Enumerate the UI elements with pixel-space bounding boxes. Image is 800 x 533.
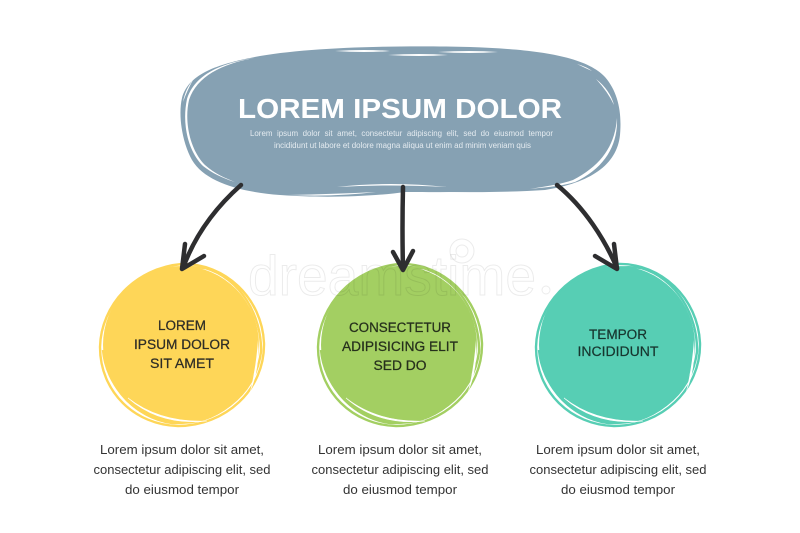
green description: consectetur adipiscing elit, sed bbox=[312, 462, 488, 477]
teal description bbox=[530, 442, 706, 497]
teal description: do eiusmod tempor bbox=[561, 482, 676, 497]
yellow description: consectetur adipiscing elit, sed bbox=[94, 462, 270, 477]
green circle label: CONSECTETUR bbox=[349, 320, 451, 335]
panel: yellow circle bbox=[100, 264, 264, 426]
green description: Lorem ipsum dolor sit amet, bbox=[318, 442, 482, 457]
header description: incididunt ut labore et dolore magna aliqua ut enim ad minim veniam quis bbox=[274, 140, 531, 150]
teal description: Lorem ipsum dolor sit amet, bbox=[536, 442, 700, 457]
teal circle label: TEMPOR bbox=[589, 327, 647, 342]
arrow: left bbox=[182, 185, 241, 269]
yellow circle label: IPSUM DOLOR bbox=[134, 337, 230, 352]
header description: Lorem ipsum dolor sit amet, consectetur adipiscing elit, sed do eiusmod tempor bbox=[250, 128, 553, 138]
green circle label bbox=[342, 320, 458, 373]
watermark: dreamstime bbox=[248, 244, 536, 307]
green description: do eiusmod tempor bbox=[343, 482, 458, 497]
header description bbox=[250, 128, 553, 150]
green circle label: SED DO bbox=[374, 358, 426, 373]
yellow description bbox=[94, 442, 270, 497]
panel: teal circle bbox=[536, 264, 700, 426]
green circle label: ADIPISICING ELIT bbox=[342, 339, 458, 354]
teal circle label bbox=[578, 327, 658, 359]
teal circle label: INCIDIDUNT bbox=[578, 344, 658, 359]
panel: header blob bbox=[180, 46, 620, 197]
yellow circle label bbox=[134, 318, 230, 371]
yellow description: Lorem ipsum dolor sit amet, bbox=[100, 442, 264, 457]
green description bbox=[312, 442, 488, 497]
teal description: consectetur adipiscing elit, sed bbox=[530, 462, 706, 477]
title: LOREM IPSUM DOLOR bbox=[238, 93, 562, 124]
yellow circle label: SIT AMET bbox=[150, 356, 214, 371]
arrow: center bbox=[393, 187, 413, 270]
panel: green circle bbox=[318, 264, 482, 426]
yellow description: do eiusmod tempor bbox=[125, 482, 240, 497]
yellow circle label: LOREM bbox=[158, 318, 206, 333]
arrow: right bbox=[557, 185, 617, 269]
